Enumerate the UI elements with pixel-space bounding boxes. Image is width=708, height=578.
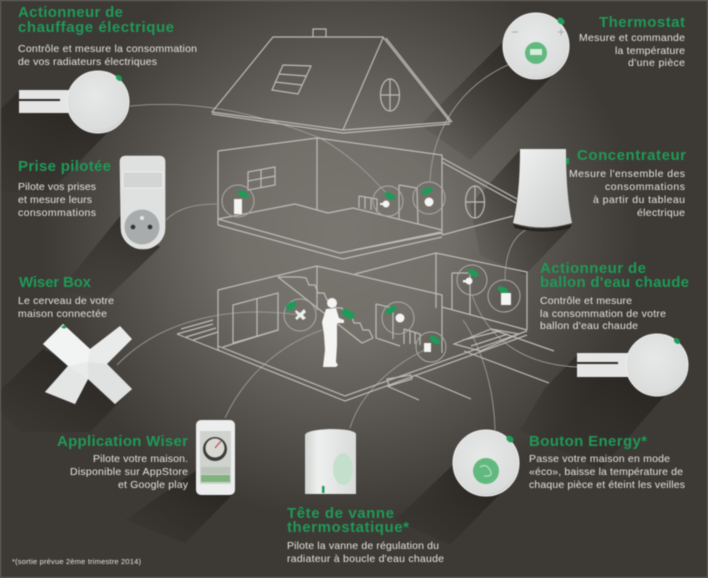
heading <box>18 4 174 36</box>
sensor: radiator downstairs <box>416 332 446 362</box>
icon: water heater actuator <box>577 334 688 396</box>
footnote: *(sortie prévue 2ème trimestre 2014) <box>12 557 142 566</box>
description <box>569 168 685 219</box>
heading <box>540 260 689 291</box>
heading: Application Wiser <box>57 433 188 450</box>
sensor: valve <box>457 265 487 295</box>
description: radiateur à boucle d'eau chaude <box>287 553 444 565</box>
sensor: wiser box <box>284 299 316 331</box>
description <box>579 32 685 69</box>
panel: prise pilotée <box>18 156 165 249</box>
icon: energy button <box>453 430 519 496</box>
description: «éco», baisse la température de <box>529 466 683 478</box>
heading: Actionneur de <box>18 4 123 21</box>
description: la température <box>615 45 685 57</box>
icon: wiser box <box>43 324 132 404</box>
description: Contrôle et mesure <box>540 295 632 307</box>
sensor: thermostat upstairs <box>413 182 445 214</box>
description: à partir du tableau <box>593 194 685 206</box>
description: chaque pièce et éteint les veilles <box>529 479 685 491</box>
description: Mesure l'ensemble des <box>569 168 685 180</box>
heading: Tête de vanne <box>287 505 394 522</box>
description: Pilote votre maison. <box>93 453 188 465</box>
person silhouette <box>322 298 344 367</box>
heading: Wiser Box <box>19 274 92 291</box>
description: et mesure leurs <box>18 194 92 206</box>
description <box>540 295 666 332</box>
heading: Actionneur de <box>540 260 646 277</box>
panel: bouton energy <box>453 430 685 496</box>
description: Pilote la vanne de régulation du <box>287 540 439 552</box>
description: consommations <box>605 181 685 193</box>
panel: concentrateur <box>513 147 686 232</box>
sensor: thermostat downstairs <box>382 302 414 334</box>
sensor: window plug <box>222 185 254 217</box>
icon: thermostat <box>503 13 569 79</box>
sensor: staircase leaf <box>340 307 356 321</box>
panel: actionneur de ballon <box>540 260 689 396</box>
description <box>529 453 685 491</box>
heading <box>287 505 409 536</box>
description <box>18 295 114 320</box>
description: Disponible sur AppStore <box>70 466 188 478</box>
description: Pilote vos prises <box>18 181 96 193</box>
description <box>287 540 444 565</box>
description: d'une pièce <box>628 57 685 69</box>
panel: tête de vanne <box>287 429 444 565</box>
description: Passe votre maison en mode <box>529 453 670 465</box>
upper floor <box>218 138 517 259</box>
heading: thermostatique* <box>287 519 409 536</box>
panel: wiser box <box>18 274 132 404</box>
icon: heater actuator <box>19 71 129 133</box>
description: Mesure et commande <box>579 32 685 44</box>
heading: Prise pilotée <box>18 158 111 175</box>
sensor: water heater <box>488 280 520 312</box>
description <box>18 43 197 68</box>
icon: thermostatic valve <box>305 429 356 494</box>
description: consommations <box>18 207 96 219</box>
description: électrique <box>637 207 685 219</box>
sensor: radiator actuator <box>373 186 403 216</box>
panel: thermostat <box>503 13 685 79</box>
panel: actionneur de chauffage <box>18 4 197 133</box>
heading: Thermostat <box>599 14 685 31</box>
roof <box>212 29 452 133</box>
description <box>70 453 189 491</box>
heading: ballon d'eau chaude <box>540 274 689 291</box>
description: la consommation de votre <box>540 308 666 320</box>
description: et Google play <box>118 479 189 491</box>
heading: Bouton Energy* <box>529 433 647 450</box>
lower floor <box>177 253 554 401</box>
house line drawing <box>177 29 554 401</box>
icon: phone <box>196 420 235 495</box>
description: Contrôle et mesure la consommation <box>18 43 197 55</box>
heading: Concentrateur <box>577 147 686 164</box>
icon: concentrator <box>513 149 572 232</box>
panel: application wiser <box>57 420 235 495</box>
heading: chauffage électrique <box>18 19 174 36</box>
description: ballon d'eau chaude <box>540 320 638 332</box>
description <box>18 181 96 219</box>
description: Le cerveau de votre <box>18 295 114 307</box>
description: de vos radiateurs électriques <box>18 56 157 68</box>
icon: smart plug <box>120 156 165 249</box>
connector lines <box>117 63 578 430</box>
description: maison connectée <box>18 308 107 320</box>
